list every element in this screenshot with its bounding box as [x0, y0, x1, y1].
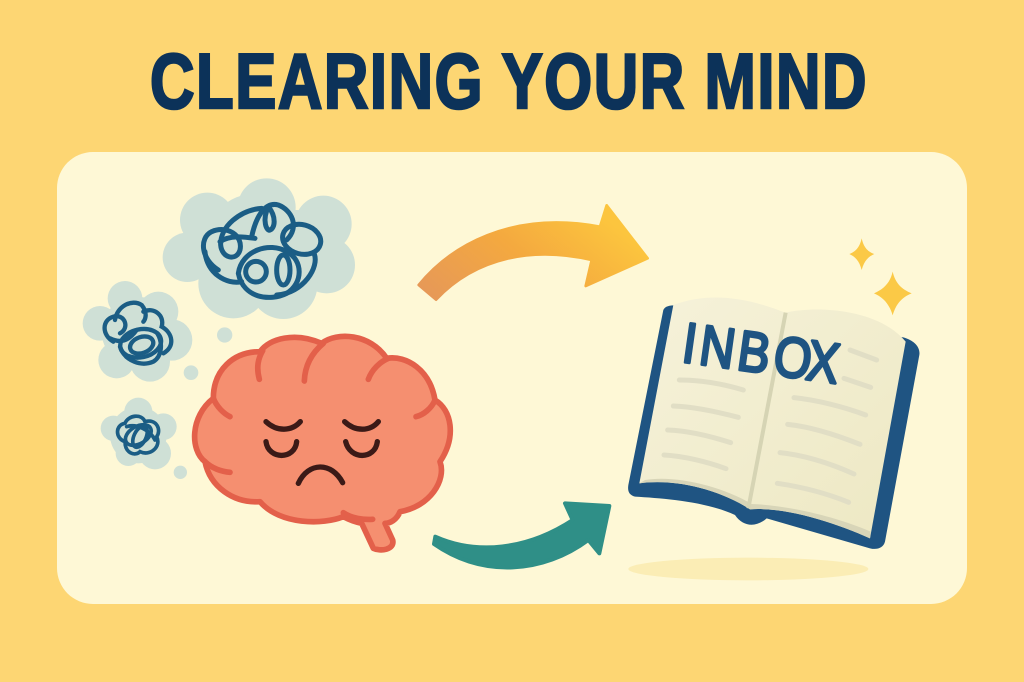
thought clouds	[83, 178, 355, 479]
panel: main content	[57, 152, 967, 604]
book cover	[628, 305, 919, 549]
arrow: orange, brain to inbox	[419, 205, 648, 300]
sparkles	[849, 238, 912, 315]
book pages	[639, 297, 906, 538]
ground shadow	[628, 558, 868, 580]
thought bubble dots	[174, 327, 232, 479]
title: CLEARING YOUR MIND	[150, 37, 867, 125]
inbox book	[628, 238, 919, 580]
page text lines	[664, 350, 877, 502]
inbox label: INBOX	[679, 311, 844, 396]
large thought cloud	[163, 178, 355, 319]
sad face	[266, 422, 378, 483]
small thought cloud	[101, 398, 177, 469]
brain character	[195, 336, 450, 550]
arrow: teal, brain to inbox	[434, 503, 609, 567]
medium thought cloud	[83, 281, 192, 382]
